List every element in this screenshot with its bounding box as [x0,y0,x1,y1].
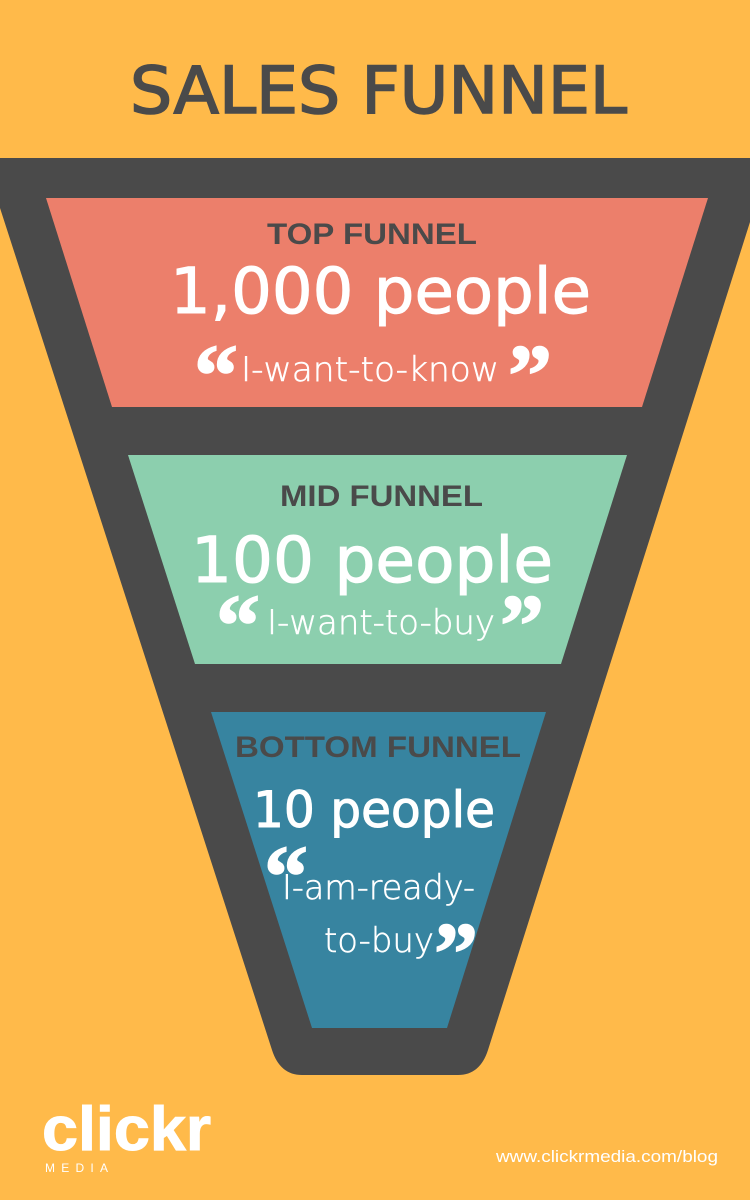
quote: I-am-ready-to-buy [264,829,478,1003]
title: SALES FUNNEL [130,54,627,129]
quote: I-want-to-buy: I-want-to-buy [267,603,495,643]
heading: bottom funnel: BOTTOM FUNNEL [235,731,521,764]
heading: mid funnel: MID FUNNEL [280,480,483,513]
quote: I-want-to-buy: ” [500,578,544,675]
quote: I-want-to-buy: “ [216,578,260,675]
panel: top funnel [46,198,708,425]
quote: I-am-ready-to-buy: I-am-ready- [282,868,475,908]
quote: I-want-to-know: ” [508,328,552,425]
quote: I-am-ready-to-buy: to-buy [324,921,434,961]
funnel body [0,158,750,1075]
quote: I-want-to-buy [216,578,544,675]
panel: bottom funnel [211,712,546,1028]
heading: top funnel: TOP FUNNEL [267,218,477,251]
logo: clickr media: clickr [42,1095,211,1164]
figure: 10 people: 10 people [253,781,495,839]
figure: 1,000 people: 1,000 people [170,255,591,328]
quote: I-want-to-know: I-want-to-know [241,350,499,390]
logo: clickr media: MEDIA [45,1161,108,1175]
quote: I-am-ready-to-buy: “ [264,829,308,926]
figure: 100 people: 100 people [191,524,553,597]
website url: www.clickrmedia.com/blog [495,1147,718,1166]
panel: mid funnel [128,455,627,675]
quote: I-am-ready-to-buy: ” [434,906,478,1003]
quote: I-want-to-know [194,328,552,425]
quote: I-want-to-know: “ [194,328,238,425]
